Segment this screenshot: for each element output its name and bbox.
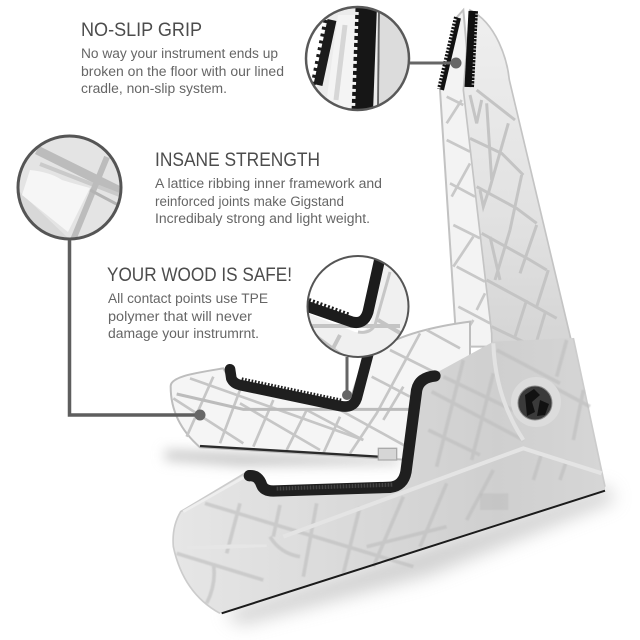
- black toothed grip tips: [439, 11, 474, 90]
- stand: front arm with ribs: [463, 10, 577, 413]
- connector line: insane strength: [70, 240, 206, 420]
- stand: front base with lattice: [173, 338, 605, 613]
- connector line: no-slip grip: [410, 58, 462, 68]
- text block: your wood is safe: [107, 265, 292, 341]
- black cradle liner: rear base: [230, 350, 369, 407]
- hinge knob logo: [511, 377, 561, 427]
- shadows under the stand: [165, 450, 616, 625]
- connector line: your wood is safe: [342, 357, 352, 400]
- text block: your wood is safe: YOUR WOOD IS SAFE!: [107, 265, 292, 286]
- text block: insane strength: [155, 150, 382, 226]
- text block: no-slip grip: cradle, non-slip system.: [81, 81, 227, 96]
- text block: insane strength: INSANE STRENGTH: [155, 150, 320, 171]
- stand: rear arm: [440, 10, 493, 347]
- text block: no-slip grip: [81, 20, 284, 96]
- text block: your wood is safe: damage your instrumrnt.: [108, 326, 259, 341]
- black cradle liner: front base: [249, 376, 435, 491]
- callout: your wood is safe magnifier: [306, 255, 410, 358]
- callout: no-slip grip magnifier: [304, 6, 410, 112]
- text block: insane strength: Incredibaly strong and light weight.: [155, 211, 370, 226]
- text block: your wood is safe: All contact points use TPE: [108, 291, 268, 306]
- text block: no-slip grip: No way your instrument ends up: [81, 46, 278, 61]
- text block: no-slip grip: broken on the floor with our lined: [81, 64, 284, 79]
- text block: insane strength: reinforced joints make Gigstand: [155, 194, 344, 209]
- callout: insane strength magnifier: [18, 136, 122, 240]
- text block: your wood is safe: polymer that will never: [108, 309, 253, 324]
- stand: rear base with lattice: [171, 322, 470, 460]
- text block: no-slip grip: NO-SLIP GRIP: [81, 20, 202, 41]
- text block: insane strength: A lattice ribbing inner framework and: [155, 176, 382, 191]
